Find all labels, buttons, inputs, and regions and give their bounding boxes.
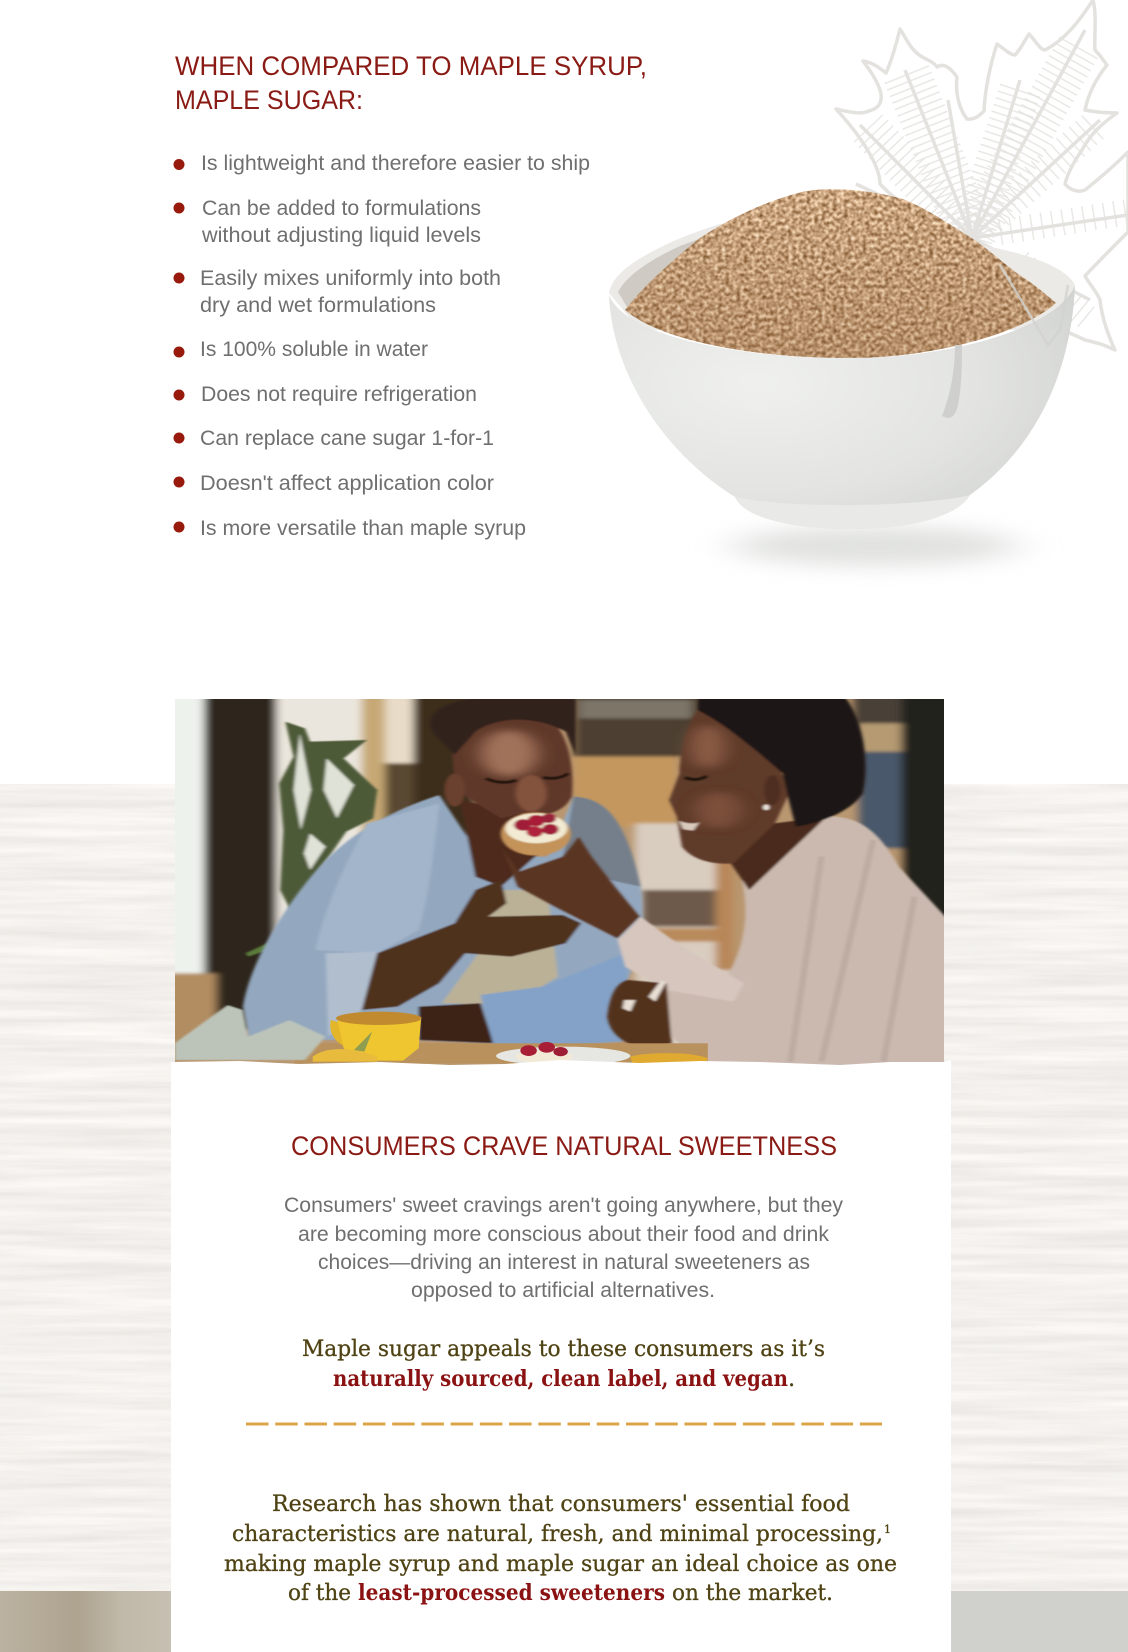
photo: couple sharing a dessert bbox=[175, 699, 944, 1065]
top heading bbox=[175, 51, 647, 115]
research statement bbox=[224, 1491, 897, 1606]
leaf lobe seen through bowl bbox=[1000, 265, 1068, 345]
white content panel bbox=[171, 1060, 951, 1652]
woman neck bbox=[728, 817, 827, 890]
bowl inner shade bbox=[618, 226, 740, 312]
man arm and hand bbox=[362, 880, 581, 1010]
bullet 7: Doesn't affect application color bbox=[200, 472, 494, 495]
man head bbox=[452, 707, 572, 818]
maple sugar appeal statement: . bbox=[788, 1366, 795, 1392]
bullet 8: Is more versatile than maple syrup bbox=[200, 517, 526, 540]
maple sugar appeal statement bbox=[302, 1336, 825, 1392]
bullet 1: Is lightweight and therefore easier to ship bbox=[201, 152, 590, 175]
table bbox=[295, 1043, 708, 1063]
man rolled sleeve bbox=[481, 953, 628, 1048]
shirt sleeve highlight bbox=[315, 803, 439, 953]
woman hair bbox=[697, 697, 866, 827]
paragraph: are becoming more conscious about their food and drink bbox=[298, 1223, 830, 1246]
leaf stem seen through bowl bbox=[942, 345, 962, 418]
woman cheek highlight bbox=[695, 792, 741, 828]
bullet 2: Can be added to formulations bbox=[202, 197, 481, 220]
bullet 4: Is 100% soluble in water bbox=[200, 338, 428, 361]
bullet 2: without adjusting liquid levels bbox=[201, 224, 481, 247]
cafe background bbox=[175, 699, 944, 1065]
woman bbox=[501, 697, 976, 1067]
bullet 5: Does not require refrigeration bbox=[201, 383, 477, 406]
research statement: 1 bbox=[884, 1523, 891, 1536]
man left sleeve cuff bbox=[326, 952, 377, 1037]
bowl of maple sugar bbox=[609, 189, 1075, 566]
research statement: least-processed sweeteners bbox=[358, 1580, 665, 1606]
top heading: MAPLE SUGAR: bbox=[175, 85, 363, 115]
shirt right shoulder shade bbox=[563, 797, 641, 887]
second cup bbox=[630, 1053, 708, 1065]
man neck bbox=[460, 800, 543, 887]
bowl foot highlight bbox=[735, 495, 970, 529]
woman smile bbox=[679, 821, 700, 831]
bottom band right bbox=[950, 1591, 1128, 1652]
plate with tart bbox=[496, 1042, 630, 1065]
research statement: of the bbox=[288, 1580, 351, 1606]
maple sugar appeal statement: Maple sugar appeals to these consumers as it’s bbox=[302, 1336, 825, 1362]
bowl body bbox=[609, 285, 1075, 529]
dashed divider bbox=[246, 1422, 882, 1426]
woman torso bbox=[664, 816, 944, 1065]
bullet 3 bbox=[174, 267, 501, 317]
man ear bbox=[444, 773, 465, 807]
pile shading bbox=[625, 189, 1056, 358]
man bbox=[243, 695, 643, 1048]
man lower arm bbox=[419, 1003, 493, 1043]
research statement: making maple syrup and maple sugar an ideal choice as one bbox=[224, 1551, 897, 1577]
woman sleeve bbox=[617, 917, 744, 1002]
paragraph bbox=[284, 1194, 843, 1302]
paragraph: choices—driving an interest in natural sweeteners as bbox=[318, 1251, 810, 1274]
sugar pile bbox=[625, 189, 1056, 358]
maple leaf illustration bbox=[836, 0, 1128, 350]
bullet 3: dry and wet formulations bbox=[200, 294, 436, 317]
yellow cup bbox=[313, 1012, 422, 1062]
research statement: characteristics are natural, fresh, and minimal processing, bbox=[232, 1521, 883, 1547]
bullet 3: Easily mixes uniformly into both bbox=[200, 267, 501, 290]
bullet 6: Can replace cane sugar 1-for-1 bbox=[200, 427, 494, 450]
woman face bbox=[669, 710, 790, 864]
woman forehead highlight bbox=[690, 725, 725, 768]
man undershirt bbox=[442, 890, 558, 1005]
wrapped flowers bbox=[175, 1005, 326, 1060]
man nose bbox=[516, 775, 547, 812]
shirt folds bbox=[790, 840, 914, 1062]
research statement: Research has shown that consumers' essential food bbox=[272, 1491, 850, 1517]
maple sugar appeal statement: naturally sourced, clean label, and vegan bbox=[333, 1366, 788, 1392]
woman eye bbox=[685, 776, 707, 779]
tart with berries bbox=[501, 812, 571, 856]
man hair bbox=[430, 695, 576, 757]
bottom band left bbox=[0, 1591, 172, 1652]
bullet list bbox=[174, 152, 590, 540]
man eyes bbox=[486, 773, 568, 782]
top heading: WHEN COMPARED TO MAPLE SYRUP, bbox=[175, 51, 647, 81]
wood texture background bbox=[0, 784, 1128, 1591]
research statement: on the market. bbox=[672, 1580, 833, 1606]
face highlight bbox=[481, 730, 537, 777]
plant bbox=[246, 722, 377, 957]
paragraph: Consumers' sweet cravings aren't going anywhere, but they bbox=[284, 1194, 843, 1217]
woman ear and earring bbox=[763, 775, 781, 810]
bowl rim back bbox=[609, 224, 1075, 330]
woman arm and hand bbox=[501, 837, 640, 938]
nails bbox=[623, 980, 665, 1012]
section heading: CONSUMERS CRAVE NATURAL SWEETNESS bbox=[291, 1131, 837, 1161]
paragraph: opposed to artificial alternatives. bbox=[411, 1279, 715, 1302]
woman second hand bbox=[607, 980, 672, 1047]
bowl shadow bbox=[730, 526, 1020, 566]
man shirt bbox=[243, 795, 643, 1048]
bullet 2 bbox=[174, 197, 481, 247]
